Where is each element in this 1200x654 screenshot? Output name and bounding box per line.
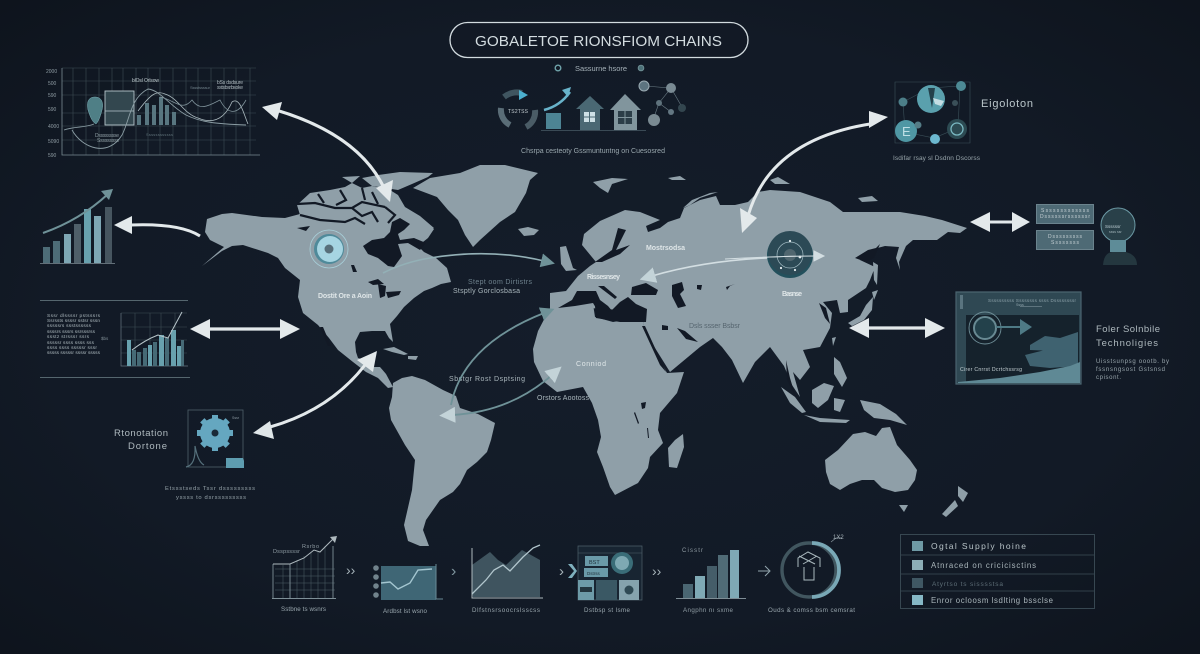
panel: text and chart row: sssssr ssss ssss sss xyxy=(47,340,95,346)
bottom bars: Angphn nı sxme xyxy=(683,607,734,614)
panel: text and chart row: ssss ssss sssssr sssr xyxy=(47,345,97,351)
map: Africa xyxy=(533,304,684,495)
map: Greenland xyxy=(413,165,538,247)
panel: top-right network: E xyxy=(902,124,911,139)
panel: text and chart row: Ssrssts ssssr sstsr sssn xyxy=(47,318,100,324)
map labels: Orstors Aootoss xyxy=(537,395,590,402)
icon: cycle: TS2TSS xyxy=(508,109,529,115)
panel: right boxes and head: Dsssssssss xyxy=(1048,234,1082,240)
panel: text and chart row xyxy=(40,300,190,378)
chevrons 4: ›› xyxy=(652,563,662,579)
panel: solar technologies dashboard: Ssssssssss Ssssssss ssss Dssssssssr xyxy=(988,298,1076,303)
bottom dashboard: BST xyxy=(589,560,600,566)
legend row 3 xyxy=(912,578,1003,588)
panel: rotation gear: yssss to dsrsssssssss xyxy=(176,495,246,501)
panel: left bar chart xyxy=(40,189,115,264)
panel: solar technologies dashboard: Cirer Cnrrst Dcrtchssrsg xyxy=(960,367,1022,373)
chevron 5 xyxy=(758,566,770,576)
bottom gauge: 1X2 xyxy=(833,535,844,541)
panel: right boxes and head: ssss ssr xyxy=(1109,230,1122,234)
map: Eurasia xyxy=(550,190,967,397)
panel: rotation gear xyxy=(114,410,255,501)
panel: top-right network xyxy=(893,81,1033,162)
icon: house small xyxy=(576,96,604,130)
map labels: Dostit Ore a Aoin xyxy=(318,293,372,300)
map: North America xyxy=(202,213,451,388)
panel: top-left line chart: bSs dsdsure xyxy=(217,80,243,86)
bottom dashboard: Dstrss xyxy=(587,571,600,576)
map: African lakes xyxy=(634,402,649,438)
chevrons 3: › xyxy=(559,563,564,580)
bottom chart 1 xyxy=(272,536,337,613)
panel: solar technologies dashboard: Foler Solnbile xyxy=(1096,324,1160,335)
panel: right boxes and head xyxy=(1036,204,1137,265)
map labels: Stsptly Gorclosbasa xyxy=(453,288,520,295)
map: Hudson Bay xyxy=(363,218,426,267)
panel: text and chart row: sssssrs ssstssssss xyxy=(47,323,92,329)
panel: text and chart row: Sssr dlssssr pstsssrs xyxy=(47,313,101,319)
panel: rotation gear: Sssr xyxy=(232,416,240,420)
map: Tasmania and New Zealand xyxy=(899,486,968,517)
thin arc: South America to Africa xyxy=(452,375,552,415)
bottom dashboard xyxy=(578,546,642,614)
map labels: Mostrsodsa xyxy=(646,245,685,252)
legend row 1: Ogtal Supply hoine xyxy=(931,541,1026,551)
map labels: Stept oom Dirtistrs xyxy=(468,279,532,286)
panel: text and chart row: ssssrs sssrs ssrsssrss xyxy=(47,329,96,335)
bottom gauge: Ouds & comss bsm cemsrat xyxy=(768,607,855,614)
bottom gauge xyxy=(768,535,855,614)
panel: top-right network: Isdifar rsay sl Dsdnn Dscorss xyxy=(893,155,981,162)
legend row 3: Atyrtso ts sisssstsa xyxy=(932,581,1003,588)
panel: text and chart row: sssss sssssr ssssr sssss xyxy=(47,350,101,356)
bottom dashboard: Dstbsp st lsme xyxy=(584,607,631,614)
map: South America xyxy=(389,376,495,546)
subtitle with dots: Sassurne hsore xyxy=(575,64,627,73)
legend row 4: Enror ocloosm lsdlting bssclse xyxy=(931,596,1053,605)
map: Britain and Ireland xyxy=(560,246,577,271)
panel: rotation gear: Dortone xyxy=(128,441,167,452)
map labels: Sbstgr Rost Dsptsing xyxy=(449,376,525,383)
arrow: Japan to right panel xyxy=(849,318,945,338)
bottom chart 1: Sstbne ts wsnrs xyxy=(281,606,326,613)
icon: growth arrow on cylinder xyxy=(544,87,571,129)
arrow: row chart to Pacific coast xyxy=(190,319,300,339)
arrow: Bering to right boxes xyxy=(970,212,1030,232)
thin arc: North America to Europe xyxy=(383,254,544,273)
map labels: Conniod xyxy=(576,361,606,368)
map: Australia xyxy=(825,427,917,492)
map: Mediterranean and inland seas xyxy=(558,226,880,398)
map labels: Dsls ssser Bsbsr xyxy=(689,323,741,330)
icon: house large xyxy=(610,94,641,130)
title pill: GOBALETOE RIONSFIOM CHAINS xyxy=(475,34,722,50)
arrow: Central America to gear panel xyxy=(253,351,377,439)
panel: top-left line chart: 4000 xyxy=(48,124,59,130)
panel: top-left line chart: Sssssssss xyxy=(97,138,120,144)
map: arctic Russia islands xyxy=(593,176,878,208)
top caption: Chsrpa cesteoty Gssmuntuntng on Cuesosred xyxy=(521,148,665,155)
chevrons 3 xyxy=(559,563,577,580)
panel: top-left line chart: 590 xyxy=(48,107,57,113)
map labels xyxy=(318,245,802,402)
panel: top-left line chart: 500 xyxy=(48,81,57,87)
panel: top-left line chart: 590 xyxy=(48,153,57,159)
panel: top-left line chart xyxy=(46,68,260,159)
map: Madagascar xyxy=(668,434,684,468)
panel: right boxes and head: Sssssssssssss xyxy=(1041,208,1090,214)
bottom bars xyxy=(676,548,746,614)
arrow: Asia through radar xyxy=(725,251,824,261)
panel: top-right network: Eigoloton xyxy=(981,98,1033,110)
bottom chart 1: Rsrbo xyxy=(302,544,319,550)
panel: right boxes and head: Dssssssrssssssr xyxy=(1040,214,1090,220)
chevrons 1: ›› xyxy=(346,562,356,578)
panel: solar technologies dashboard: Technoligies xyxy=(1096,338,1158,349)
thin arc: Asia to Europe xyxy=(652,257,813,276)
panel: solar technologies dashboard: cpisont. xyxy=(1096,375,1121,381)
map labels: Basnse xyxy=(782,291,802,298)
panel: top-left line chart: sstsbsrbsoke xyxy=(217,85,243,91)
panel: top-left line chart: blOsl Orlsow xyxy=(132,78,159,84)
panel: solar technologies dashboard: Uisstsunpsg oootb. by xyxy=(1096,359,1169,365)
bottom chart 2: Ardbst lst wsno xyxy=(383,608,428,615)
arrow: top-left chart to Arctic xyxy=(262,102,393,202)
panel: text and chart row: $bs xyxy=(101,336,109,341)
legend panel xyxy=(900,534,1094,608)
panel: top-left line chart: 5090 xyxy=(48,139,59,145)
panel: right boxes and head: Ssssssss xyxy=(1051,240,1080,246)
panel: right boxes and head: Ssssssr xyxy=(1105,224,1121,229)
thin arc: Atlantic loop up to Africa xyxy=(451,313,544,405)
arrow: Russia to network xyxy=(740,111,888,233)
panel: top-left line chart: Sssstssssur xyxy=(190,85,211,90)
subtitle with dots xyxy=(555,64,644,73)
icon: North America target xyxy=(310,230,348,268)
panel: solar technologies dashboard: fssnsngsost Gstsnsd xyxy=(1096,367,1165,373)
panel: top-left line chart: Ssssssssssss xyxy=(146,132,173,137)
panel: solar technologies dashboard: Ssss xyxy=(1016,303,1024,307)
map: Arctic islands xyxy=(297,172,434,240)
map: Great Lakes and inland waters xyxy=(297,226,401,346)
icon: Asia radar xyxy=(767,231,813,278)
legend row 2: Atnraced on cricicisctins xyxy=(931,561,1036,570)
panel: top-left line chart: 590 xyxy=(48,93,57,99)
world map xyxy=(202,165,968,546)
bottom chart 2 xyxy=(373,564,443,615)
panel: top-left line chart: 2000 xyxy=(46,69,57,75)
bottom chart 1: Dsspssssr xyxy=(273,549,300,555)
map labels: Rissesnsey xyxy=(587,274,620,281)
bottom bars: Cisstr xyxy=(682,548,703,554)
panel: solar technologies dashboard xyxy=(956,292,1169,384)
chevron 2: › xyxy=(451,563,456,580)
map: Iceland xyxy=(518,227,539,236)
map: Southeast Asia islands xyxy=(781,357,907,425)
baseline xyxy=(541,130,646,131)
icon: network xyxy=(639,81,686,126)
panel: rotation gear: Rtonotation xyxy=(114,428,168,439)
bottom chart 3: Dlfstnsrsoocrslsscss xyxy=(472,607,540,614)
panel: rotation gear: Etssstseds Tssr dsssssssss xyxy=(165,486,255,492)
top icon row xyxy=(501,81,686,131)
map: Caribbean islands xyxy=(383,347,418,360)
panel: top-left line chart: Dsssssssse xyxy=(95,133,119,139)
icon: cycle xyxy=(501,90,535,127)
title pill xyxy=(450,22,748,58)
panel: text and chart row: ssstz strsssr ssrs xyxy=(47,334,90,340)
bottom chart 3 xyxy=(472,545,543,614)
map: Japan, Sakhalin, Taiwan xyxy=(832,262,878,346)
arrow: left chart to Alaska xyxy=(114,216,200,236)
